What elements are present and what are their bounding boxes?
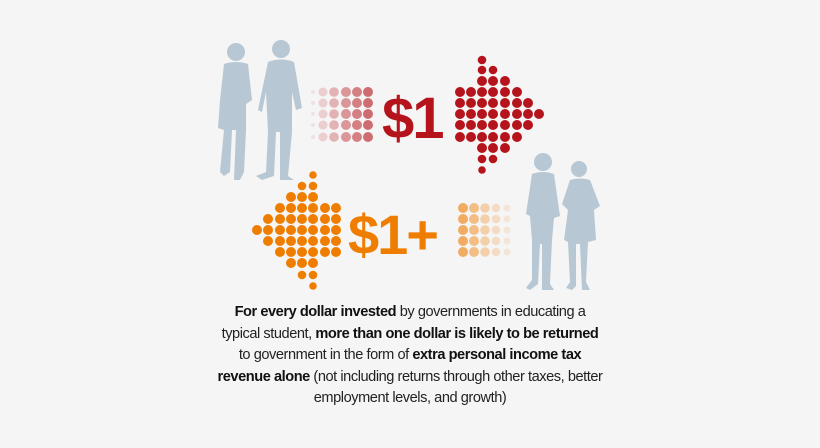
silhouette: man bottom right [526,153,560,290]
caption text [218,304,603,406]
caption text: to government in the form of extra personal income tax [239,347,581,363]
caption text: typical student, more than one dollar is likely to be returned [222,326,598,342]
icon: red faded dots [311,87,373,142]
caption text: revenue alone (not including returns through other taxes, better [218,369,602,385]
caption text: employment levels, and growth) [314,390,506,406]
icon: orange dot arrow left [252,171,341,290]
heading: $1 red: $1 [382,86,443,151]
silhouette: woman top left [218,43,252,180]
silhouette: woman bottom right [562,161,600,290]
caption text: For every dollar invested by governments in educating a [235,304,585,320]
silhouette: man top left [256,40,302,180]
icon: red dot arrow right [455,56,544,174]
icon: orange faded dots [458,203,510,257]
heading: $1+ orange: $1+ [348,203,437,266]
